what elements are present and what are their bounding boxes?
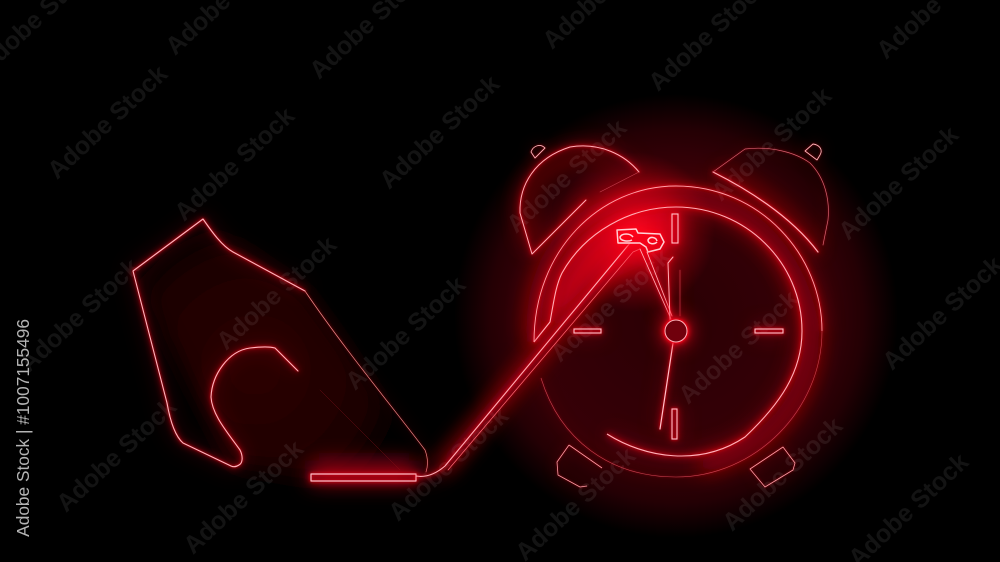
clock inner ring bbox=[534, 207, 802, 456]
hand outline bbox=[133, 219, 427, 472]
watermark: Adobe Stock repeated: Adobe Stock bbox=[673, 285, 804, 409]
clock hour ticks bbox=[574, 214, 783, 439]
right foot bbox=[750, 447, 795, 487]
clock outer ring bbox=[534, 186, 822, 477]
red glow wash bbox=[133, 94, 898, 538]
watermark: Adobe Stock repeated: Adobe Stock bbox=[501, 114, 632, 238]
clock hands bbox=[640, 249, 680, 429]
watermark: Adobe Stock repeated: Adobe Stock bbox=[717, 412, 848, 536]
watermark: Adobe Stock repeated: Adobe Stock bbox=[545, 243, 676, 367]
watermark: Adobe Stock repeated: Adobe Stock bbox=[14, 253, 145, 377]
watermark: Adobe Stock repeated: Adobe Stock bbox=[340, 271, 471, 395]
watermark: Adobe Stock repeated: Adobe Stock bbox=[383, 402, 514, 526]
watermark: Adobe Stock repeated: Adobe Stock bbox=[42, 60, 173, 184]
right bell bbox=[713, 144, 828, 252]
watermark: Adobe Stock repeated: Adobe Stock bbox=[169, 102, 300, 226]
left bell bbox=[520, 145, 639, 254]
clock centre hub bbox=[665, 320, 687, 342]
watermark: Adobe Stock repeated: Adobe Stock bbox=[374, 70, 505, 194]
pen stroke and body bbox=[311, 243, 640, 481]
left foot bbox=[557, 445, 602, 487]
clock pin bbox=[617, 229, 664, 252]
watermark: Adobe Stock repeated: Adobe Stock bbox=[178, 435, 309, 559]
watermark: Adobe Stock repeated: Adobe Stock bbox=[211, 231, 342, 355]
watermark: Adobe Stock repeated: Adobe Stock bbox=[833, 121, 964, 245]
watermark: Adobe Stock repeated: Adobe Stock bbox=[706, 82, 837, 206]
watermark: Adobe Stock repeated: Adobe Stock bbox=[51, 393, 182, 517]
stock id text: Adobe Stock | #1007155496 bbox=[13, 319, 33, 537]
